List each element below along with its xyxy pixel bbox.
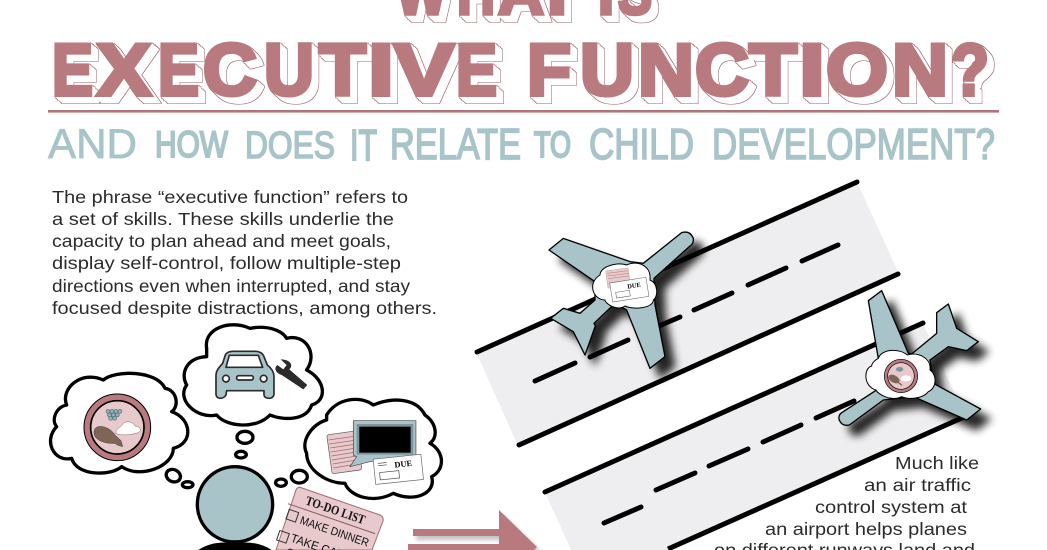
intro paragraph: display self-control, follow multiple-step [52,253,401,273]
title: executive function [52,30,989,111]
title: executive function: V [394,30,454,111]
bubble: homework [305,399,441,498]
icon: car [216,351,274,398]
plane 2 [839,291,981,425]
right paragraph: an airport helps planes [765,519,967,539]
plane 1 [549,232,693,368]
title: executive function: F [527,30,571,111]
title: executive function: N [892,30,948,111]
right paragraph [714,453,979,550]
title: executive function: E [52,30,93,111]
subtitle: DOES [245,125,335,167]
icon: notebook [327,431,362,474]
thought cloud on plane 1: DUE [627,282,641,291]
to-do list: TO-DO LIST [304,493,368,527]
right paragraph: an air traffic [864,475,971,495]
subtitle: RELATE [390,120,521,169]
arrow [408,510,537,550]
icon: rice cloud [116,422,141,435]
right paragraph: control system at [815,497,967,517]
title: executive function: E [456,30,497,111]
thought cloud on plane 2 [866,350,935,398]
right paragraph: Much like [895,453,979,473]
title: executive function: C [695,30,749,111]
title: executive function: T [319,30,366,111]
subtitle [48,120,995,170]
subtitle: TO [534,124,571,165]
person: head and shoulders [197,467,273,550]
title: executive function: C [203,30,257,111]
title: executive function: T [749,30,797,111]
icon: laptop [350,421,416,467]
small thought circles [164,431,307,488]
title: executive function: ? [951,30,989,111]
icon: peas [106,409,122,420]
subtitle: CHILD [589,120,694,169]
intro paragraph: capacity to plan ahead and meet goals, [52,231,391,251]
icon: wrench [275,359,307,389]
thought cloud on plane 1 [593,263,657,308]
bubble: car repair [184,325,322,425]
title: what is [396,0,652,28]
title: executive function: E [158,30,199,111]
runway 2 [545,323,965,550]
bubble: dinner [51,373,188,473]
intro paragraph [52,187,437,318]
title: executive function: U [580,30,634,111]
subtitle: IT [350,121,377,170]
subtitle: HOW [155,124,228,165]
icon: drumstick [94,426,123,447]
thought bubbles with person [51,325,441,550]
icon: due card: DUE [394,459,413,470]
to-do list [271,487,383,550]
subtitle: AND [48,120,137,167]
title: executive function: O [826,30,888,111]
title: executive function: N [638,30,694,111]
intro paragraph: The phrase “executive function” refers to [52,187,408,207]
intro paragraph: focused despite distractions, among others. [52,298,437,318]
title: executive function: I [368,30,394,111]
title: executive function: U [264,30,314,111]
intro paragraph: a set of skills. These skills underlie the [52,209,394,229]
runway 1 [476,182,899,446]
intro paragraph: directions even when interrupted, and stay [52,276,410,296]
title: executive function: I [799,30,825,111]
title: executive function: X [97,30,151,111]
